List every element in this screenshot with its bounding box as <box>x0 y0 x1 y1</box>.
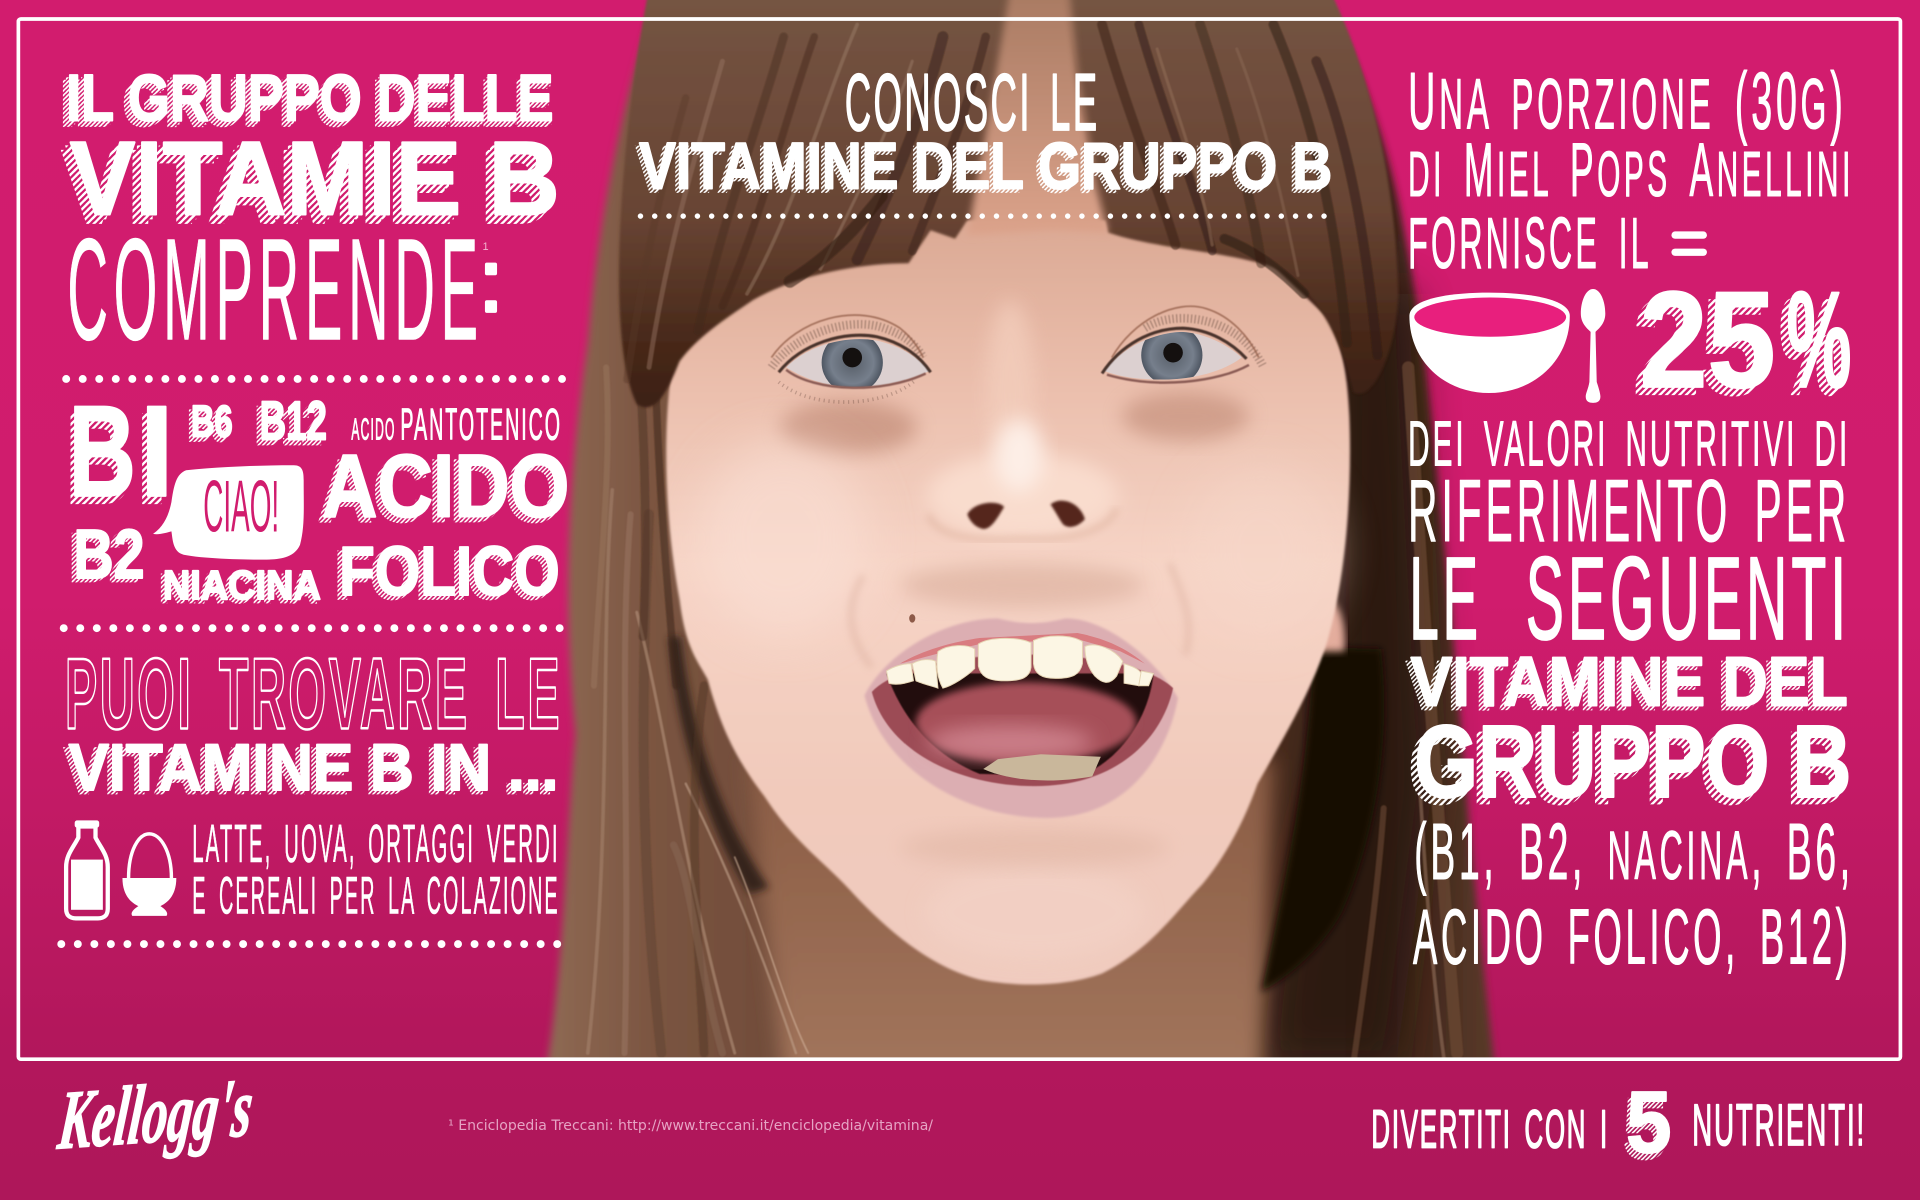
b6: B6 <box>191 398 233 447</box>
text: COMPRENDE <box>67 208 484 370</box>
b6: B6 <box>187 402 229 451</box>
big number 25 percent: % <box>1787 264 1851 417</box>
text: PANTOTENICO <box>400 401 562 450</box>
panel: centre title <box>636 58 1337 216</box>
number five: 5 <box>1622 1080 1668 1177</box>
icon: spoon <box>1581 289 1605 403</box>
text: fornisce il equals <box>1408 204 1707 284</box>
title line two: VITAMINE DEL GRUPPO B <box>639 130 1332 204</box>
face <box>666 220 1350 985</box>
b2: B2 <box>69 519 140 597</box>
dotted divider <box>64 625 561 631</box>
nose <box>927 419 1118 540</box>
speech bubble: CIAO! <box>203 464 279 547</box>
panel: left column <box>60 62 569 944</box>
heading: comprende: : <box>479 231 503 330</box>
facial shading <box>698 300 1335 959</box>
mouth <box>864 618 1178 818</box>
ear <box>1322 600 1348 658</box>
niacina: NIACINA <box>159 565 317 611</box>
b12: B12 <box>260 390 327 452</box>
number five: 5 <box>1626 1074 1671 1171</box>
heading: comprende: 1 <box>482 241 489 253</box>
acido pantotenico: ACIDO <box>351 413 396 447</box>
vitamin list <box>65 379 569 614</box>
acido: ACIDO <box>322 436 569 536</box>
kellogg's logo: Kellogg's <box>54 1061 257 1168</box>
b1: B <box>69 379 136 524</box>
icon: egg cup <box>122 834 176 916</box>
niacina: NIACINA <box>163 562 321 608</box>
heading: comprende <box>67 208 503 370</box>
icon: milk bottle <box>66 820 108 918</box>
heading: vitamine del: VITAMINE DEL <box>1411 642 1848 720</box>
forehead parting <box>967 0 1108 235</box>
acido: ACIDO <box>317 441 564 541</box>
upper gum <box>900 633 1145 664</box>
b2: B2 <box>73 515 144 593</box>
heading: vitamine b in: VITAMINE B IN ... <box>69 731 558 805</box>
speech bubble <box>153 464 304 560</box>
heading: il gruppo delle: IL GRUPPO DELLE <box>63 65 553 139</box>
dark hair right of the jaw <box>1261 647 1384 992</box>
b12 <box>255 390 327 456</box>
text: LATTE, UOVA, ORTAGGI VERDI <box>192 814 560 874</box>
text: PUOI TROVARE LE <box>65 637 562 751</box>
upper teeth <box>887 636 1153 688</box>
folico: FOLICO <box>339 532 560 610</box>
food list text <box>192 814 560 925</box>
folico: FOLICO <box>334 536 555 614</box>
dotted divider <box>66 376 562 382</box>
text: le seguenti: LE <box>1409 533 1482 664</box>
footnote: ¹ Enciclopedia Treccani: http://www.treccani.it/enciclopedia/vitamina/ <box>448 1118 933 1134</box>
icon: bowl <box>1409 293 1570 393</box>
bangs <box>619 0 1031 407</box>
heading: vitamine b in: VITAMINE B IN ... <box>64 734 553 808</box>
heading: vitamie b: VITAMIE B <box>61 129 551 246</box>
photo: smiling girl <box>545 0 1496 1078</box>
left eye <box>771 315 931 402</box>
big number 25 percent: 25 <box>1632 271 1768 424</box>
panel: centre title: CONOSCI LE <box>845 58 1100 148</box>
text: E CEREALI PER LA COLAZIONE <box>192 866 560 925</box>
dotted divider <box>61 941 560 947</box>
dotted divider <box>640 214 1337 218</box>
b1: B <box>65 386 132 531</box>
heading: il gruppo delle: IL GRUPPO DELLE <box>60 67 550 141</box>
dark hair mass right <box>1261 294 1433 1065</box>
big number 25 percent: % <box>1779 271 1844 424</box>
neck <box>747 759 1273 1078</box>
big number 25 percent: 25 <box>1640 264 1776 417</box>
acido pantotenico <box>351 401 562 450</box>
heading: vitamie b: VITAMIE B <box>66 125 555 242</box>
tagline: DIVERTITI CON I <box>1371 1099 1609 1159</box>
right eye <box>1102 306 1264 386</box>
b1: I <box>140 379 174 524</box>
panel: right column <box>1406 57 1854 981</box>
b1: I <box>135 386 169 531</box>
heading: il gruppo delle: IL GRUPPO DELLE <box>66 62 553 136</box>
dark hair left of the jaw <box>669 637 769 894</box>
b12: B12 <box>255 394 322 456</box>
hair silhouette <box>545 0 1496 1078</box>
bangs strands <box>627 24 1378 380</box>
text: le seguenti <box>1409 533 1850 664</box>
title line two: VITAMINE DEL GRUPPO B <box>636 133 1329 207</box>
big number 25 percent <box>1632 264 1851 424</box>
heading: vitamie b: VITAMIE B <box>70 120 560 237</box>
tagline <box>1371 1074 1866 1177</box>
hair strands <box>588 318 1457 1065</box>
heading: vitamine del: VITAMINE DEL <box>1406 647 1843 725</box>
